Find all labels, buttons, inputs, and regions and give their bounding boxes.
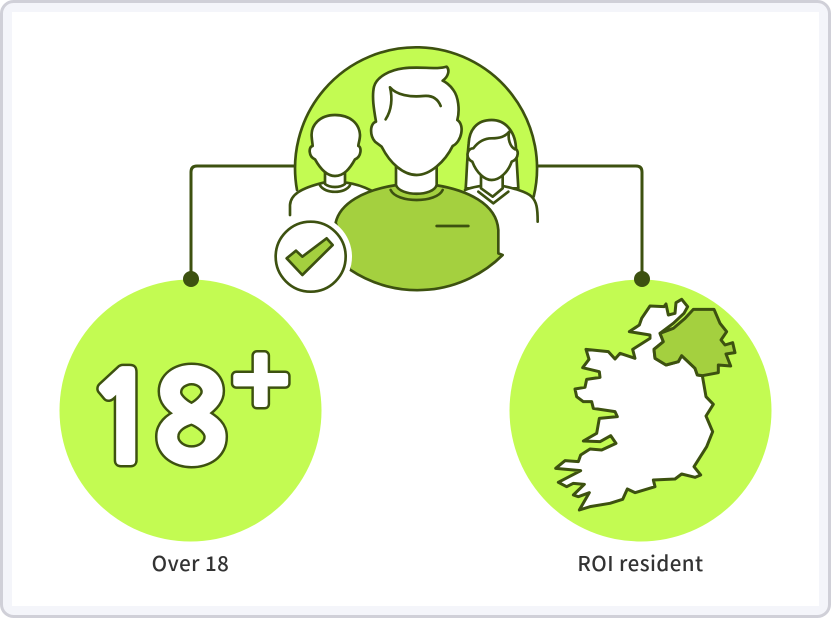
panel: over 18 circle (60, 280, 322, 542)
icon: group of people (269, 47, 538, 298)
main person head (371, 67, 462, 175)
right connector (537, 166, 650, 287)
right person (465, 120, 538, 240)
map of Ireland (556, 299, 735, 510)
main person pocket (437, 222, 468, 230)
left person (290, 115, 372, 227)
republic of Ireland (556, 299, 713, 510)
green backdrop circle (295, 47, 537, 197)
main person collar and neck (391, 167, 443, 200)
text: 18 plus: + (230, 338, 291, 428)
label: over 18: Over 18 (152, 547, 229, 577)
left connector (183, 166, 296, 287)
text: 18 plus: 18 (86, 360, 228, 480)
panel: ROI resident circle (510, 280, 772, 542)
icon: check badge (269, 215, 352, 298)
main person shirt (336, 185, 503, 290)
label: ROI resident: ROI resident (577, 547, 704, 577)
text: 18 plus (86, 338, 291, 480)
main person hair line (386, 87, 441, 119)
northern Ireland (654, 309, 735, 376)
text: 18 plus: 18 (86, 360, 228, 480)
text: 18 plus: + (230, 338, 291, 428)
backdrop circle outline (295, 47, 537, 197)
